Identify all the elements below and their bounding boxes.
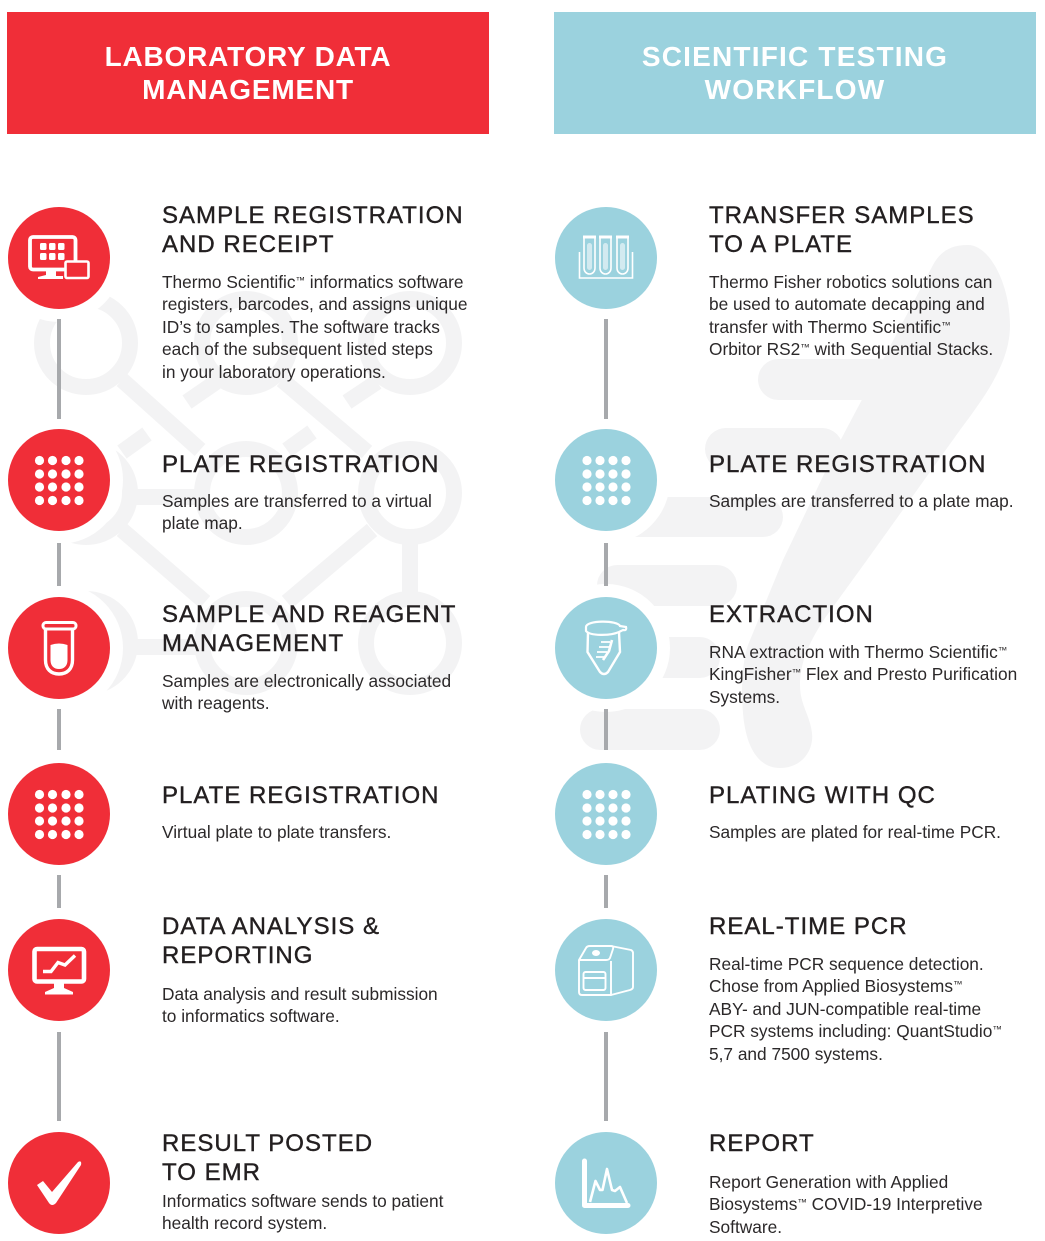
- connector lines: right column: [604, 319, 608, 1121]
- heading: PLATE REGISTRATION: [162, 451, 440, 478]
- description: with reagents.: [162, 693, 270, 713]
- panel: real-time PCR: [555, 913, 1002, 1064]
- panel: sample and reagent management: [8, 597, 456, 713]
- description: Samples are transferred to a virtual: [162, 491, 432, 511]
- heading: [162, 913, 380, 969]
- heading: [162, 202, 464, 258]
- description: KingFisher™ Flex and Presto Purification: [709, 664, 1017, 684]
- description: Samples are transferred to a plate map.: [709, 491, 1014, 511]
- icon: check mark: [8, 1132, 110, 1234]
- description: Biosystems™ COVID-19 Interpretive: [709, 1194, 983, 1214]
- header: scientific testing workflow: [554, 12, 1036, 134]
- description: Samples are electronically associated: [162, 671, 451, 691]
- description: [162, 1191, 444, 1233]
- icon: well plate: [555, 763, 657, 865]
- description: in your laboratory operations.: [162, 362, 386, 382]
- panel: report: [555, 1130, 983, 1237]
- icon: sample tube: [8, 597, 110, 699]
- icon: microcentrifuge tube with helix: [555, 597, 657, 699]
- header: laboratory data management: MANAGEMENT: [142, 74, 354, 105]
- heading: TO A PLATE: [709, 231, 853, 258]
- panel: transfer samples to a plate: [555, 202, 993, 359]
- panel: sample registration and receipt: [8, 202, 468, 382]
- description: transfer with Thermo Scientific™: [709, 317, 951, 337]
- heading: SAMPLE REGISTRATION: [162, 202, 464, 229]
- panel: plate registration (right): [555, 429, 1014, 531]
- description: Chose from Applied Biosystems™: [709, 976, 962, 996]
- description: Software.: [709, 1217, 782, 1237]
- icon: well plate: [8, 763, 110, 865]
- connector lines: left column: [57, 319, 61, 1121]
- description: plate map.: [162, 513, 243, 533]
- header: scientific testing workflow: SCIENTIFIC TESTING: [642, 41, 948, 72]
- heading: [162, 1130, 373, 1186]
- description: 5,7 and 7500 systems.: [709, 1044, 883, 1064]
- description: RNA extraction with Thermo Scientific™: [709, 642, 1007, 662]
- description: to informatics software.: [162, 1006, 340, 1026]
- heading: TO EMR: [162, 1159, 261, 1186]
- panel: plating with QC: [555, 763, 1001, 865]
- description: each of the subsequent listed steps: [162, 339, 433, 359]
- description: [709, 954, 1002, 1064]
- heading: REPORT: [709, 1130, 815, 1157]
- description: ID’s to samples. The software tracks: [162, 317, 440, 337]
- heading: PLATE REGISTRATION: [162, 782, 440, 809]
- heading: RESULT POSTED: [162, 1130, 373, 1157]
- description: [162, 272, 468, 382]
- panel: plate registration transfers (left): [8, 763, 440, 865]
- description: Systems.: [709, 687, 780, 707]
- heading: [709, 202, 975, 258]
- heading: SAMPLE AND REAGENT: [162, 601, 456, 628]
- description: [709, 1172, 983, 1237]
- description: [709, 272, 993, 359]
- description: [162, 491, 432, 533]
- panel: data analysis and reporting: [8, 913, 438, 1026]
- heading: PLATING WITH QC: [709, 782, 936, 809]
- panel: extraction: [555, 597, 1017, 707]
- description: Thermo Fisher robotics solutions can: [709, 272, 992, 292]
- heading: EXTRACTION: [709, 601, 874, 628]
- description: Samples are plated for real-time PCR.: [709, 822, 1001, 842]
- description: be used to automate decapping and: [709, 294, 985, 314]
- description: Virtual plate to plate transfers.: [162, 822, 391, 842]
- icon: peaks chart: [555, 1132, 657, 1234]
- heading: MANAGEMENT: [162, 630, 344, 657]
- icon: monitor and tablet: [8, 207, 110, 309]
- description: ABY- and JUN-compatible real-time: [709, 999, 981, 1019]
- heading: TRANSFER SAMPLES: [709, 202, 975, 229]
- heading: PLATE REGISTRATION: [709, 451, 987, 478]
- description: health record system.: [162, 1213, 327, 1233]
- description: Orbitor RS2™ with Sequential Stacks.: [709, 339, 993, 359]
- header: scientific testing workflow: WORKFLOW: [705, 74, 885, 105]
- description: Informatics software sends to patient: [162, 1191, 443, 1211]
- icon: well plate: [8, 429, 110, 531]
- heading: DATA ANALYSIS &: [162, 913, 380, 940]
- description: Report Generation with Applied: [709, 1172, 948, 1192]
- description: registers, barcodes, and assigns unique: [162, 294, 468, 314]
- header: laboratory data management: [7, 12, 489, 134]
- description: [162, 671, 451, 713]
- description: Data analysis and result submission: [162, 984, 438, 1004]
- icon: well plate: [555, 429, 657, 531]
- panel: result posted to EMR: [8, 1130, 444, 1234]
- description: [162, 984, 438, 1026]
- heading: [162, 601, 456, 657]
- icon: PCR instrument: [555, 919, 657, 1021]
- heading: REPORTING: [162, 942, 313, 969]
- icon: monitor with chart: [8, 919, 110, 1021]
- header: laboratory data management: LABORATORY DATA: [105, 41, 391, 72]
- description: PCR systems including: QuantStudio™: [709, 1021, 1002, 1041]
- description: Thermo Scientific™ informatics software: [162, 272, 463, 292]
- icon: tube rack: [555, 207, 657, 309]
- description: Real-time PCR sequence detection.: [709, 954, 984, 974]
- description: [709, 642, 1017, 707]
- panel: plate registration (left): [8, 429, 440, 533]
- heading: REAL-TIME PCR: [709, 913, 908, 940]
- heading: AND RECEIPT: [162, 231, 335, 258]
